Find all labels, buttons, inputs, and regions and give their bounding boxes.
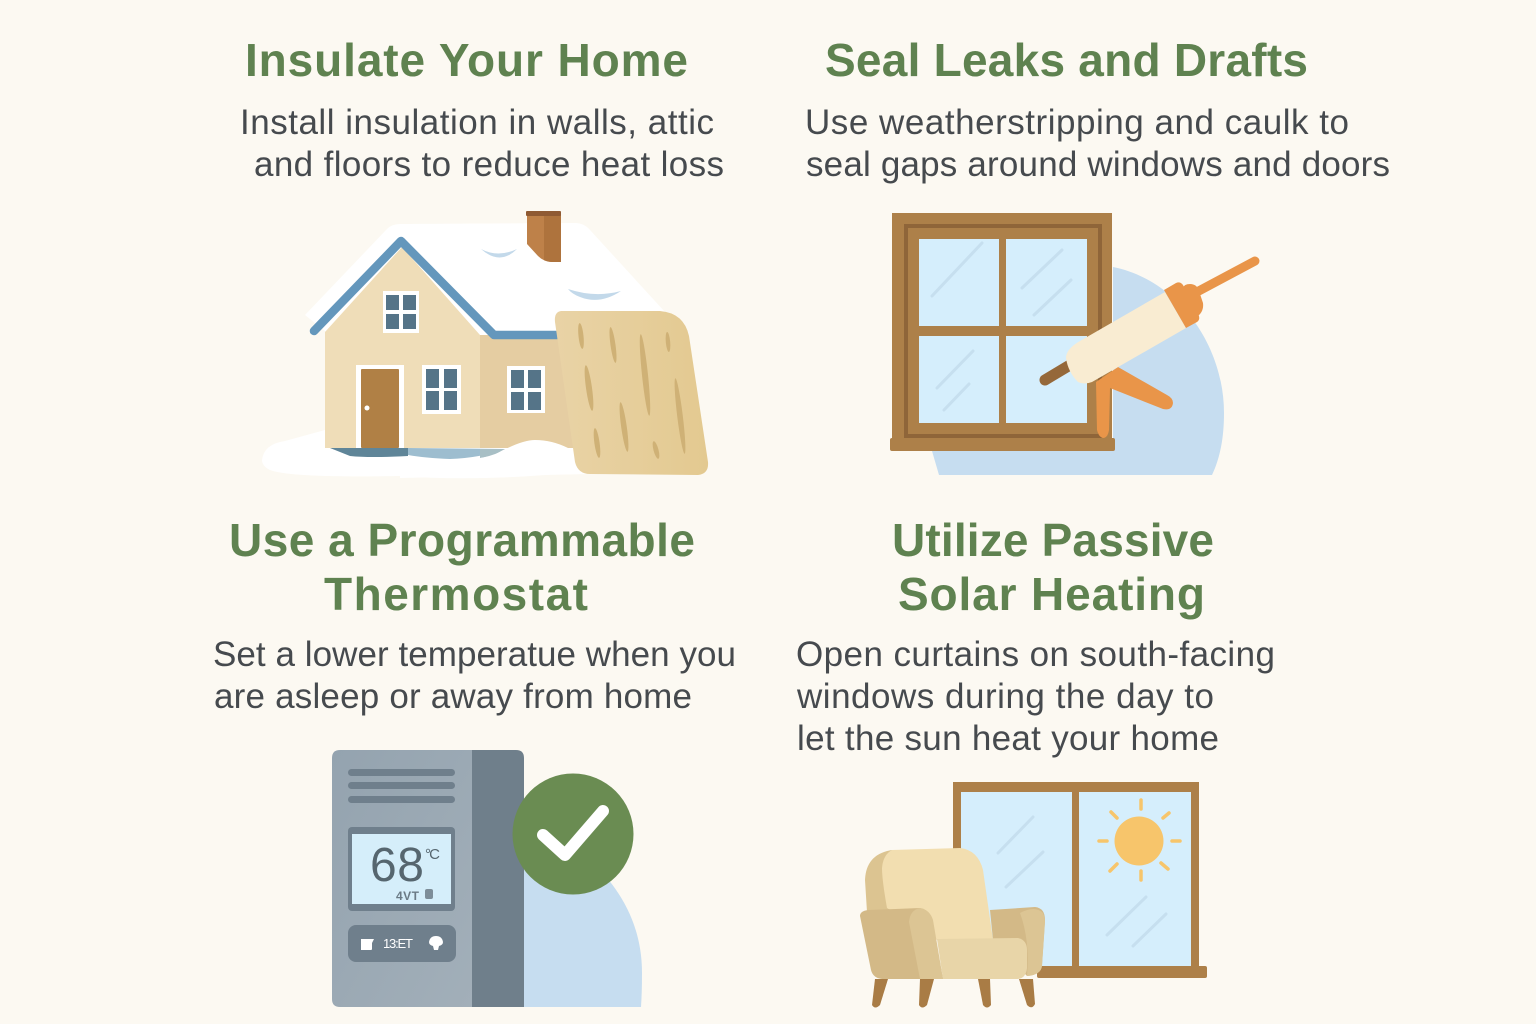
text block: solar description: windows during the day to — [796, 677, 1214, 716]
text block: sealing description — [805, 103, 1390, 184]
thermostat screen: 4VT — [396, 889, 420, 903]
armchair — [860, 848, 1045, 1008]
thermostat control bar — [348, 925, 456, 962]
thermostat screen: °C — [425, 846, 440, 863]
insulation batt — [555, 311, 708, 475]
panel: insulate your home — [240, 34, 724, 478]
panel: programmable thermostat — [213, 514, 736, 1007]
heading: utilize passive solar heating — [892, 514, 1214, 620]
text block: solar description: Open curtains on south-facing — [796, 635, 1275, 674]
thermostat screen — [348, 827, 455, 911]
window frame — [890, 213, 1115, 451]
text block: insulation description: Install insulation in walls, attic — [240, 103, 714, 142]
icon: green check badge — [512, 774, 634, 894]
panel: passive solar heating — [796, 514, 1275, 1008]
text block: solar description: let the sun heat your home — [797, 719, 1219, 758]
heading: use a programmable thermostat: Thermostat — [324, 568, 588, 620]
icon: thermostat with check — [332, 750, 642, 1007]
text block: insulation description — [240, 103, 724, 184]
heading: utilize passive solar heating: Utilize Passive — [892, 514, 1214, 566]
icon: armchair by sunny window — [860, 782, 1207, 1008]
text block: solar description — [796, 635, 1275, 758]
text block: sealing description: Use weatherstripping and caulk to — [805, 103, 1349, 142]
text block: thermostat description: are asleep or away from home — [214, 677, 692, 716]
text block: sealing description: seal gaps around windows and doors — [806, 145, 1390, 184]
icon: sun — [1099, 800, 1180, 880]
door — [356, 365, 404, 448]
lower window right — [507, 366, 545, 413]
upper window — [383, 291, 419, 333]
heading: seal leaks and drafts: Seal Leaks and Drafts — [825, 34, 1308, 86]
lower window left — [422, 365, 461, 414]
text block: insulation description: and floors to reduce heat loss — [254, 145, 724, 184]
text block: thermostat description — [213, 635, 736, 716]
heading: insulate your home: Insulate Your Home — [245, 34, 688, 86]
icon: snowy house with insulation — [262, 211, 708, 478]
sunny window — [953, 782, 1207, 978]
icon: window with caulk gun — [890, 213, 1255, 475]
panel: seal leaks and drafts — [805, 34, 1390, 475]
thermostat control bar: 13:ET — [383, 936, 413, 951]
icon: chimney — [526, 211, 561, 262]
text block: thermostat description: Set a lower temperatue when you — [213, 635, 736, 674]
thermostat screen: 68 — [370, 839, 424, 892]
heading: use a programmable thermostat — [229, 514, 695, 620]
heading: utilize passive solar heating: Solar Heating — [898, 568, 1205, 620]
caulk gun — [1045, 261, 1255, 438]
thermostat body — [332, 750, 524, 1007]
heading: use a programmable thermostat: Use a Programmable — [229, 514, 695, 566]
